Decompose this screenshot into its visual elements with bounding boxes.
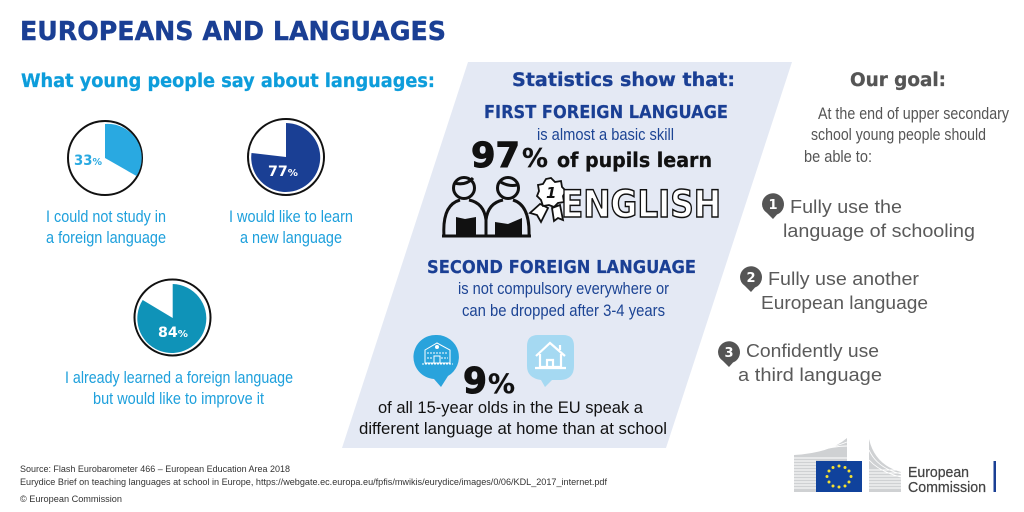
statistic: 97% of pupils learn bbox=[471, 136, 712, 176]
title: EUROPEANS AND LANGUAGES bbox=[20, 17, 446, 47]
icon: two pupils reading bbox=[442, 178, 531, 236]
caption: already learned: but would like to improve it bbox=[93, 389, 264, 408]
statistic: 97% of pupils learn: of pupils learn bbox=[557, 148, 712, 172]
goal 3 bbox=[718, 340, 882, 385]
goal 3: 3 bbox=[724, 346, 734, 361]
text: goal intro: school young people should bbox=[811, 125, 986, 144]
source notes: Eurydice Brief on teaching languages at school in Europe, https://webgate.ec.europa.eu/fpfis/mwikis/eurydice/images/0/06/KDL_2017_internet.pdf bbox=[20, 477, 607, 487]
icon: home speech bubble bbox=[527, 335, 574, 387]
goal 2: 2 bbox=[746, 271, 756, 286]
text: ENGLISH outlined: ENGLISH bbox=[561, 183, 721, 226]
goal 1: language of schooling bbox=[783, 220, 975, 241]
caption: could not study: a foreign language bbox=[46, 228, 166, 247]
text: 15-year olds: different language at home than at school bbox=[359, 420, 667, 438]
European Commission logo: Commission bbox=[908, 479, 986, 496]
goal 2 bbox=[740, 266, 928, 313]
goal 3: a third language bbox=[738, 364, 882, 385]
caption: already learned: I already learned a foreign language bbox=[65, 368, 293, 387]
heading: our goal: Our goal: bbox=[850, 70, 946, 91]
statistic: 9% bbox=[463, 361, 515, 402]
pie chart: 84% bbox=[134, 280, 210, 356]
caption: could not study bbox=[46, 207, 166, 247]
statistic: 9%: 9 bbox=[463, 361, 487, 402]
European Commission logo bbox=[794, 438, 996, 496]
text: 15-year olds: of all 15-year olds in the EU speak a bbox=[378, 399, 644, 417]
European Commission logo: European bbox=[908, 464, 969, 481]
goal 1: 1 bbox=[768, 198, 778, 213]
text: not compulsory: is not compulsory everywhere or bbox=[458, 280, 669, 298]
text: almost a basic skill: is almost a basic skill bbox=[537, 126, 674, 144]
text: 15-year olds bbox=[359, 399, 667, 438]
caption: would like to learn: a new language bbox=[240, 228, 342, 247]
source notes bbox=[20, 464, 607, 504]
text: not compulsory bbox=[458, 280, 669, 320]
caption: could not study: I could not study in bbox=[46, 207, 166, 226]
heading: statistics show that: Statistics show that: bbox=[512, 70, 735, 91]
text: goal intro bbox=[804, 104, 1009, 166]
caption: would like to learn: I would like to learn bbox=[229, 207, 353, 226]
statistic: 97% of pupils learn: % bbox=[522, 144, 548, 174]
goal 2: Fully use another bbox=[768, 268, 919, 289]
icon: first place rosette bbox=[530, 178, 566, 222]
caption: already learned bbox=[65, 368, 293, 408]
icon: school speech bubble bbox=[413, 335, 459, 387]
pie chart: 77% bbox=[248, 119, 324, 195]
heading: first foreign language: FIRST FOREIGN LANGUAGE bbox=[484, 103, 728, 123]
goal 1: Fully use the bbox=[790, 196, 902, 217]
heading: what young people say: What young people say about languages: bbox=[21, 71, 435, 92]
caption: would like to learn bbox=[229, 207, 353, 247]
pie chart: 77%: 77% bbox=[268, 164, 298, 180]
pie chart: 33% bbox=[68, 121, 142, 195]
heading: second foreign language: SECOND FOREIGN LANGUAGE bbox=[427, 258, 696, 278]
icon: first place rosette: 1 bbox=[546, 184, 556, 202]
goal 2: European language bbox=[761, 292, 928, 313]
source notes: © European Commission bbox=[20, 494, 122, 504]
goal 3: Confidently use bbox=[746, 340, 879, 361]
statistic: 9%: % bbox=[488, 369, 515, 400]
pie chart: 84%: 84% bbox=[158, 325, 188, 341]
goal 1 bbox=[762, 193, 975, 241]
panel: statistics background bbox=[342, 62, 792, 448]
pie chart: 33%: 33% bbox=[74, 153, 102, 169]
statistic: 97% of pupils learn: 97 bbox=[471, 136, 520, 176]
text: not compulsory: can be dropped after 3-4 years bbox=[462, 302, 665, 320]
source notes: Source: Flash Eurobarometer 466 – European Education Area 2018 bbox=[20, 464, 290, 474]
text: goal intro: be able to: bbox=[804, 147, 872, 166]
